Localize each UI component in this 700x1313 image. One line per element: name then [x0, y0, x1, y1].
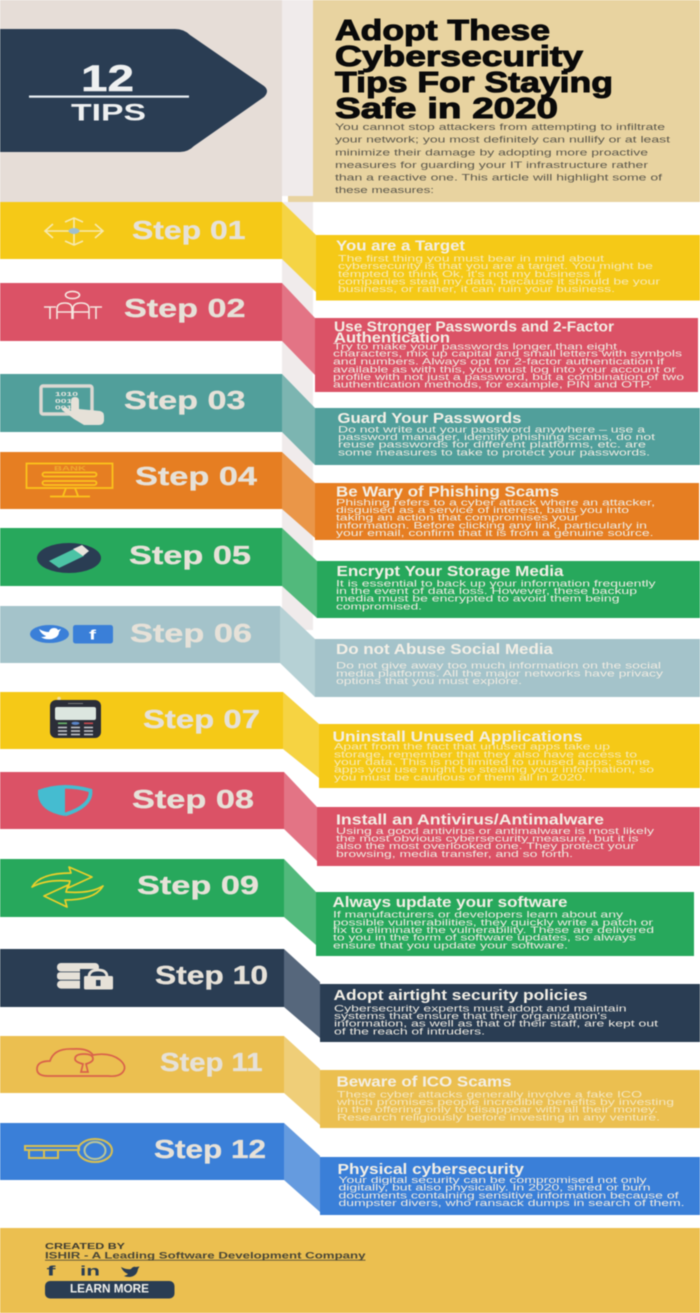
panel: antivirus [317, 807, 700, 866]
step 04 [0, 452, 699, 540]
social icons: f [46, 1262, 56, 1278]
panel: encrypt: Encrypt Your Storage Media [336, 564, 565, 580]
step 07: Step 07 [143, 704, 260, 734]
step 02: Step 02 [124, 293, 246, 323]
social icons [46, 1262, 140, 1278]
icon: bank monitor: BANK [54, 466, 87, 472]
panel: stronger passwords: Use Stronger Passwords and 2-Factor [334, 320, 614, 336]
panel: uninstall: storage, remember that they also have access to [334, 749, 637, 759]
badge: 12 tips: 12 [81, 58, 134, 99]
panel: header right [288, 0, 700, 202]
panel: antivirus: also the most overlooked one. They protect your [336, 841, 635, 851]
step 06 [0, 606, 700, 697]
panel: stronger passwords [315, 318, 698, 392]
icon: shield [38, 785, 91, 816]
button: learn more [45, 1281, 174, 1298]
icon: tablet with hand: 0010 [55, 399, 78, 405]
panel: you are a target: The first thing you must bear in mind about [338, 254, 605, 264]
panel: phishing [315, 483, 699, 540]
icon: tablet with hand [41, 386, 104, 425]
panel: phishing: your email, confirm that it is from a genuine source. [336, 528, 654, 538]
step 09: Step 09 [137, 870, 259, 900]
intro text: You cannot stop attackers from attempting to infiltrate [335, 122, 665, 132]
panel: update: fix to eliminate the vulnerability. These are delivered [333, 925, 654, 935]
icon: sync arrows [32, 867, 103, 907]
panel: phishing: taking an action that compromises your [336, 513, 579, 523]
panel: policies [320, 984, 700, 1042]
icon: usb drive [37, 543, 101, 573]
step 10: Step 10 [155, 960, 268, 990]
title: Safe in 2020 [335, 93, 558, 125]
step 09 [0, 859, 694, 956]
panel: policies: information, as well as that of their staff, are kept out [334, 1019, 659, 1029]
panel: update: possible vulnerabilities, they quickly write a patch or [333, 917, 653, 927]
icon: bank monitor [26, 464, 112, 496]
icon: cloud keyhole [37, 1049, 125, 1076]
panel: phishing: disguised as a service of interest, baits you into [336, 505, 629, 515]
panel: phishing: information. Before clicking any link, particularly in [336, 520, 647, 530]
panel: ico scams: which promises people incredible benefits by investing [335, 1097, 674, 1107]
step 10 [0, 949, 700, 1042]
step 03: Step 03 [124, 385, 246, 415]
panel: phishing: Phishing refers to a cyber attack where an attacker, [336, 497, 655, 507]
title: Adopt These [335, 15, 550, 47]
panel: you are a target: companies steal my data, because it should be your [338, 276, 660, 286]
step 08: Step 08 [132, 784, 254, 814]
panel: you are a target: tempted to think Ok, it's not my business if [338, 269, 602, 279]
title [335, 15, 613, 125]
panel: stronger passwords: Authentication [334, 330, 450, 346]
panel: antivirus: Install an Antivirus/Antimalware [336, 812, 604, 828]
step 03 [0, 374, 700, 465]
credit text: CREATED BY [45, 1242, 126, 1251]
credit text [45, 1242, 366, 1261]
panel: social media: Do not give away too much information on the social [336, 661, 661, 671]
credit text: ISHIR - A Leading Software Development Company [45, 1250, 366, 1260]
intro text: your network; you most definitely can nullify or at least [335, 134, 671, 144]
panel: uninstall: Uninstall Unused Applications [332, 730, 582, 746]
panel: physical: Your digital security can be compromised not only [338, 1175, 647, 1185]
panel: ico scams: Beware of ICO Scams [336, 1074, 512, 1090]
panel: policies: systems that ensure that their organization's [334, 1011, 608, 1021]
panel: stronger passwords: available as with this, you must log into your account or [333, 364, 676, 374]
step 12 [0, 1123, 700, 1215]
step 08 [0, 772, 700, 866]
intro text: measures for guarding your IT infrastructure rather [335, 160, 648, 170]
panel: encrypt: compromised. [336, 602, 422, 612]
panel: uninstall: your data. This is not limited to unused apps; some [334, 757, 650, 767]
step 01 [0, 202, 700, 300]
panel: encrypt: It is essential to back up your information frequently [336, 578, 656, 588]
panel: you are a target: cybersecurity is that you are a target. You might be [338, 261, 653, 271]
icon: key [25, 1139, 112, 1162]
panel: you are a target [316, 235, 700, 300]
panel: guard your passwords: Guard Your Passwords [338, 411, 522, 427]
step 11: Step 11 [160, 1047, 262, 1077]
step 02 [0, 283, 698, 392]
panel: header left [0, 0, 313, 202]
panel: update: If manufacturers or developers learn about any [333, 910, 624, 920]
title: Cybersecurity [335, 41, 583, 73]
panel: physical: documents containing sensitive information because of [338, 1190, 679, 1200]
icon: facebook badge [73, 625, 113, 644]
panel: physical [320, 1157, 700, 1215]
badge: 12 tips: TIPS [71, 100, 146, 126]
panel: encrypt: media must be encrypted to avoid them being [336, 594, 620, 604]
step 12: Step 12 [154, 1134, 266, 1164]
panel: uninstall: Apart from the fact that unused apps take up [334, 742, 610, 752]
panel: update [316, 892, 694, 956]
icon: move arrows [45, 218, 103, 245]
panel: ico scams: These cyber attacks generally involve a fake ICO [337, 1089, 642, 1099]
panel: ico scams: in the offering only to disappear with all their money. [337, 1105, 658, 1115]
panel: stronger passwords: and numbers. Always opt for 2-factor authentication if [333, 356, 665, 366]
panel: encrypt [317, 561, 700, 618]
panel: guard your passwords: password manager, identify phishing scams, do not [338, 432, 656, 442]
step 07 [0, 692, 700, 788]
step 01: Step 01 [132, 215, 246, 245]
panel: stronger passwords: characters, mix up capital and small letters with symbols [333, 349, 683, 359]
panel: antivirus: browsing, media transfer, and so forth. [336, 849, 573, 859]
panel: guard your passwords [315, 408, 700, 465]
panel: footer [0, 1228, 700, 1313]
intro text: these measures: [335, 185, 434, 195]
panel: social media [315, 639, 700, 697]
panel: stronger passwords: profile with not just a password, but a combination of two [333, 372, 684, 382]
icon: tablet with hand: 001 [55, 406, 72, 412]
panel: social media: media platforms. All the major networks have privacy [336, 668, 664, 678]
intro text: than a reactive one. This article will highlight some of [335, 172, 663, 182]
intro text [335, 122, 671, 195]
panel: update: Always update your software [332, 895, 568, 911]
step 05: Step 05 [129, 540, 251, 570]
panel: uninstall [319, 724, 700, 788]
step 11 [0, 1036, 700, 1128]
panel: stronger passwords: Try to make your passwords longer than eight [333, 342, 618, 352]
button: learn more: LEARN MORE [70, 1284, 149, 1296]
panel: antivirus: the most obvious cybersecurity measure, but it is [336, 833, 639, 843]
panel: policies: Adopt airtight security policies [334, 988, 588, 1004]
panel: policies: Cybersecurity experts must adopt and maintain [334, 1003, 627, 1013]
icon: tablet with hand: 1010 [55, 392, 78, 398]
panel: phishing: Be Wary of Phishing Scams [336, 484, 559, 500]
panel: physical: digitally, but also physically. In 2020, shred or burn [338, 1183, 651, 1193]
panel: physical: Physical cybersecurity [338, 1162, 524, 1178]
icon: people [44, 291, 102, 319]
panel: social media: Do not Abuse Social Media [336, 642, 554, 658]
panel: ico scams: Research religiously before investing in any venture. [337, 1112, 660, 1122]
panel: physical: dumpster divers, who ransack dumps in search of them. [338, 1198, 684, 1208]
panel: encrypt: in the event of data loss. However, these backup [336, 586, 637, 596]
panel: you are a target: business, or rather, it can ruin your business. [338, 284, 615, 294]
icon: twitter badge [30, 625, 69, 643]
panel: policies: of the reach of intruders. [334, 1027, 485, 1037]
panel: ico scams [320, 1070, 700, 1128]
panel: guard your passwords: Do not write out your password anywhere – use a [338, 424, 645, 434]
icon: database lock [57, 963, 116, 991]
step 05 [0, 528, 700, 618]
icon: phone [50, 697, 101, 738]
panel: social media: options that you must explore. [336, 676, 522, 686]
panel: guard your passwords: some measures to take to protect your passwords. [338, 448, 650, 458]
step 06: Step 06 [130, 618, 252, 648]
panel: guard your passwords: reuse passwords for different platforms, etc. are [338, 440, 646, 450]
title: Tips For Staying [335, 67, 613, 99]
panel: uninstall: you must be cautious of them all in 2020. [334, 772, 586, 782]
icon: facebook badge: f [89, 626, 96, 642]
panel: uninstall: apps you use might be stealing your information, so [334, 765, 654, 775]
panel: you are a target: You are a Target [336, 238, 465, 254]
panel: update: to you in the form of software updates, so always [333, 933, 637, 943]
badge: 12 tips [0, 29, 267, 152]
panel: stronger passwords: authentication methods, for example, PIN and OTP. [333, 380, 652, 390]
intro text: minimize their damage by adopting more proactive [335, 148, 648, 158]
step 04: Step 04 [135, 461, 258, 491]
panel: update: ensure that you update your software. [333, 940, 568, 950]
panel: antivirus: Using a good antivirus or antimalware is most likely [336, 826, 655, 836]
social icons: in [80, 1262, 100, 1278]
